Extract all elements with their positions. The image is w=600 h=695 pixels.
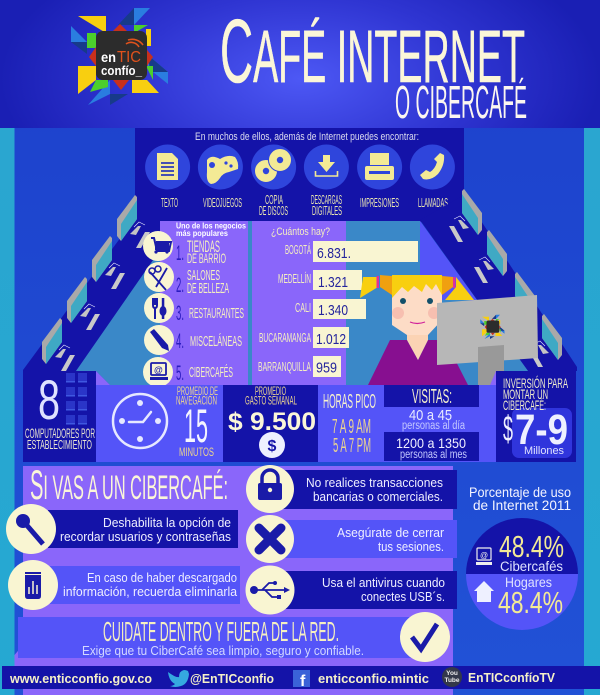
service labels: DE DISCOS xyxy=(259,203,288,218)
icon: youtube: Tube xyxy=(444,677,460,684)
item 3: restaurantes: 3. xyxy=(176,302,184,325)
service labels: IMPRESIONES xyxy=(360,195,399,210)
cibercafés share: Cibercafés xyxy=(500,559,563,574)
stat: weekly spend: $ 9.500 xyxy=(228,408,316,436)
tip: delete downloads: información, recuerda eliminarla xyxy=(63,585,237,599)
usage heading: de Internet 2011 xyxy=(473,498,571,513)
bucaramanga value: 1.012 xyxy=(316,331,346,348)
cali value: 1.340 xyxy=(318,302,348,319)
service labels: COPIA xyxy=(265,192,283,207)
twitter handle: @EnTICconfio xyxy=(190,671,274,686)
icon: texto xyxy=(145,144,190,190)
callout: take care xyxy=(18,612,450,662)
large monitor xyxy=(437,295,538,385)
panel: how many xyxy=(252,221,418,385)
tip: antivirus usb: conectes USB´s. xyxy=(361,590,445,604)
item 5: cibercafés: @ xyxy=(154,365,163,375)
service labels: DIGITALES xyxy=(312,203,342,218)
item 1: tiendas de barrio xyxy=(143,231,226,266)
tip: delete downloads xyxy=(8,560,240,610)
bogotá value: BOGOTÁ xyxy=(285,242,311,257)
icon: clock xyxy=(113,394,167,448)
icon: youtube xyxy=(442,667,462,687)
callout: take care: Exige que tu CiberCafé sea limpio, seguro y confiable. xyxy=(82,644,364,658)
stat: visits xyxy=(384,385,496,462)
list intro xyxy=(176,220,246,238)
usage circle xyxy=(466,518,578,630)
right desk with computers xyxy=(346,189,577,385)
medellín value: MEDELLÍN xyxy=(278,271,311,286)
stat: investment: 7-9 xyxy=(515,406,568,454)
facebook page: enticconfio.mintic xyxy=(318,671,429,686)
panel: internet usage xyxy=(466,485,578,630)
stat: peak hours: 5 A 7 PM xyxy=(333,435,371,457)
services intro: En muchos de ellos, además de Internet puedes encontrar: xyxy=(195,131,419,143)
item 5: cibercafés xyxy=(143,357,233,387)
usage heading: Porcentaje de uso xyxy=(469,485,571,500)
stat: average browsing: 15 xyxy=(184,399,208,452)
panel: popular businesses: DE BELLEZA xyxy=(187,281,229,297)
stat: average browsing: PROMEDIO DE xyxy=(177,386,218,398)
icon: facebook xyxy=(293,670,310,690)
text: COMPUTADORES POR xyxy=(25,425,95,441)
list intro: Uno de los negocios xyxy=(176,220,246,230)
stat: computers per establishment xyxy=(23,368,96,462)
icon: descargas digitales xyxy=(304,144,349,190)
stat: peak hours xyxy=(318,385,384,462)
item 5: cibercafés: 5. xyxy=(176,362,184,385)
service labels xyxy=(161,192,448,218)
bucaramanga value xyxy=(259,327,349,348)
panel: popular businesses xyxy=(143,220,252,387)
tip: antivirus usb: Usa el antivirus cuando xyxy=(322,576,445,590)
medellín value xyxy=(278,270,362,291)
tip: no banking: No realices transacciones xyxy=(306,476,443,490)
icon: youtube: You xyxy=(446,670,458,677)
tip: no banking xyxy=(246,465,457,513)
barranquilla value xyxy=(258,356,341,377)
item 4: misceláneas xyxy=(144,325,242,355)
item 1: tiendas de barrio: 1. xyxy=(176,242,184,265)
stat: peak hours: 7 A 9 AM xyxy=(332,416,371,438)
stat: computers per establishment: 8 xyxy=(38,368,60,431)
stat: visits: personas al mes xyxy=(400,449,467,461)
logo: en TIC confío: en xyxy=(101,49,116,65)
stat: investment: MONTAR UN xyxy=(503,386,548,402)
bucaramanga value: BUCARAMANGA xyxy=(259,330,311,345)
item 4: misceláneas: 4. xyxy=(176,330,184,353)
stat: weekly spend xyxy=(223,385,318,462)
stat: average browsing xyxy=(96,385,223,462)
tip: disable remember: recordar usuarios y contraseñas xyxy=(60,530,231,544)
cibercafés share: @ xyxy=(480,551,488,560)
usage heading xyxy=(469,485,571,513)
girl character xyxy=(360,275,474,385)
question heading: ¿Cuántos hay? xyxy=(271,226,330,238)
barranquilla value: BARRANQUILLA xyxy=(258,359,311,374)
panel: popular businesses: RESTAURANTES xyxy=(189,305,244,322)
stat: visits: 1200 a 1350 xyxy=(396,435,466,451)
tip: disable remember: Deshabilita la opción de xyxy=(103,516,231,530)
item 1: tiendas de barrio: TIENDAS xyxy=(187,238,220,256)
list intro: más populares xyxy=(176,228,228,238)
icon: llamadas xyxy=(410,144,455,190)
item 2: salones de belleza: 2. xyxy=(176,274,184,297)
header band xyxy=(0,0,600,128)
icon: copia de discos xyxy=(251,144,296,190)
panel: popular businesses: CIBERCAFÉS xyxy=(189,364,233,381)
cali value: CALI xyxy=(295,300,311,315)
cibercafés share: 48.4% xyxy=(499,529,564,564)
cibercafés share xyxy=(476,529,564,574)
stat: weekly spend: PROMEDIO xyxy=(255,386,286,398)
icon: impresiones xyxy=(357,144,402,190)
tip: disable remember xyxy=(6,504,238,554)
item 3: restaurantes xyxy=(144,293,244,325)
tip: no banking: bancarias o comerciales. xyxy=(313,490,443,504)
tip: delete downloads: En caso de haber descargado xyxy=(87,571,237,585)
bogotá value: 6.831. xyxy=(317,245,351,262)
logo: en TIC confío xyxy=(71,8,168,105)
stat: investment: $ xyxy=(503,408,513,449)
panel: tips xyxy=(6,461,457,695)
left desk with computers xyxy=(23,195,160,385)
tip: close sessions: Asegúrate de cerrar xyxy=(337,526,444,540)
medellín value: 1.321 xyxy=(318,274,348,291)
stat: investment: CIBERCAFÉ: xyxy=(503,397,546,413)
stat: average browsing: MINUTOS xyxy=(179,447,214,459)
bogotá value xyxy=(285,241,418,262)
stat: average browsing: NAVEGACIÓN xyxy=(176,394,217,408)
text: HORAS PICO xyxy=(323,391,376,413)
stat: visits: VISITAS: xyxy=(412,386,452,408)
service labels: TEXTO xyxy=(161,195,178,210)
hogares share: 48.4% xyxy=(498,585,563,620)
stat: weekly spend: $ xyxy=(268,438,277,455)
hogares share: Hogares xyxy=(505,575,552,590)
panel: services xyxy=(135,128,464,222)
tip: antivirus usb xyxy=(246,566,457,614)
youtube channel: EnTICconfíoTV xyxy=(468,670,555,685)
icon: videojuegos xyxy=(198,144,243,190)
stat: visits: personas al día xyxy=(402,420,465,432)
panel: popular businesses: MISCELÁNEAS xyxy=(190,333,242,350)
icon: twitter xyxy=(168,670,189,687)
panel: services: LLAMADAS xyxy=(418,195,448,210)
cali value xyxy=(295,299,366,319)
service labels: VIDEOJUEGOS xyxy=(203,195,242,210)
stat: computers per establishment: ESTABLECIMIENTO xyxy=(27,437,92,452)
item 1: tiendas de barrio: DE BARRIO xyxy=(187,250,226,266)
stat: weekly spend: GASTO SEMANAL xyxy=(245,396,297,408)
hogares share xyxy=(474,575,563,620)
footer bar xyxy=(2,666,600,690)
tip: close sessions: tus sesiones. xyxy=(378,540,444,554)
stat: investment xyxy=(496,371,576,462)
stat: visits: 40 a 45 xyxy=(409,407,452,424)
item 2: salones de belleza: SALONES xyxy=(187,268,220,284)
website: www.enticconfio.gov.co xyxy=(9,671,152,686)
logo: en TIC confío: confío_ xyxy=(101,63,143,78)
logo: en TIC confío: TIC xyxy=(117,49,141,66)
item 2: salones de belleza xyxy=(144,262,229,297)
tip: close sessions xyxy=(246,515,457,563)
stat: investment: Millones xyxy=(524,445,564,457)
barranquilla value: 959 xyxy=(316,360,337,376)
panel: tips: SI VAS A UN CIBERCAFÉ: xyxy=(30,461,228,508)
service labels: DESCARGAS xyxy=(311,192,342,207)
icon: facebook: f xyxy=(300,673,306,690)
